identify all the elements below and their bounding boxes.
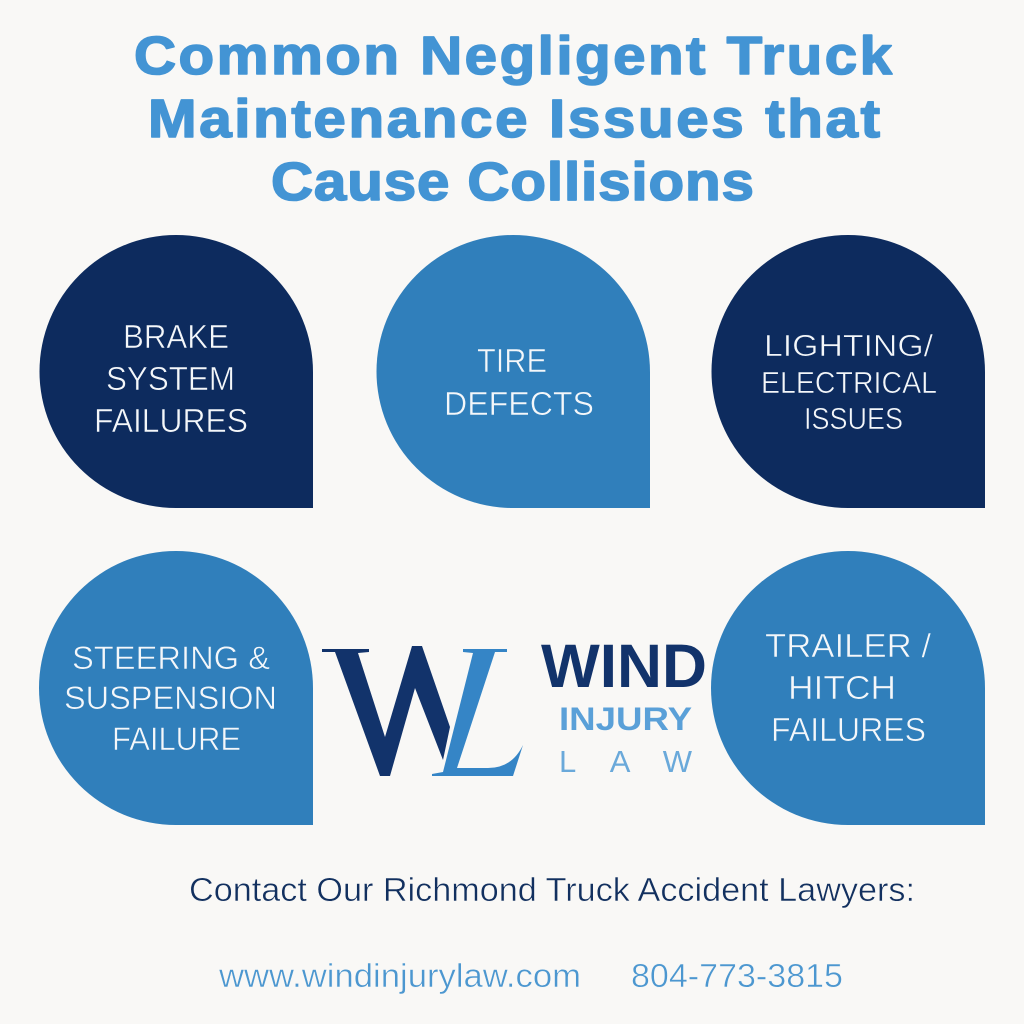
contact details [218,957,843,994]
panel: steering and suspension failure: SUSPENSION [64,680,277,716]
title [134,25,893,212]
logo wordmark: WIND [541,632,707,700]
panel: trailer hitch failures [711,551,985,825]
title: Common Negligent Truck [134,25,893,86]
logo: Wind Injury Law: LAW [559,744,693,779]
panel: trailer hitch failures: TRAILER / [765,627,932,664]
panel: lighting electrical issues [712,235,985,508]
contact details: www.windinjurylaw.com [218,957,581,994]
contact details: 804-773-3815 [631,957,843,994]
logo letter L [432,649,523,776]
panel: brake system failures: FAILURES [94,402,248,439]
contact heading: Contact Our Richmond Truck Accident Lawyers: [189,871,915,908]
panel: brake system failures [40,235,313,508]
panel: brake system failures: SYSTEM [106,360,235,397]
panel: trailer hitch failures: FAILURES [771,711,926,748]
title: Cause Collisions [271,151,754,212]
panel: steering and suspension failure: FAILURE [112,721,241,757]
logo: Wind Injury Law: INJURY [559,701,692,737]
title: Maintenance Issues that [148,88,880,149]
panel: tire defects: TIRE [477,342,547,379]
panel: brake system failures: BRAKE [123,318,229,355]
panel: trailer hitch failures: HITCH [788,669,896,706]
panel: lighting electrical issues: LIGHTING/ [764,328,933,363]
panel: lighting electrical issues: ISSUES [804,401,903,436]
panel: tire defects [377,235,650,508]
panel: steering and suspension failure [39,551,313,825]
logo letter W [322,646,450,776]
panel: tire defects: DEFECTS [444,385,594,422]
logo: Wind Injury Law [322,632,707,779]
panel: steering and suspension failure: STEERING & [72,640,270,676]
panel: lighting electrical issues: ELECTRICAL [761,365,937,400]
